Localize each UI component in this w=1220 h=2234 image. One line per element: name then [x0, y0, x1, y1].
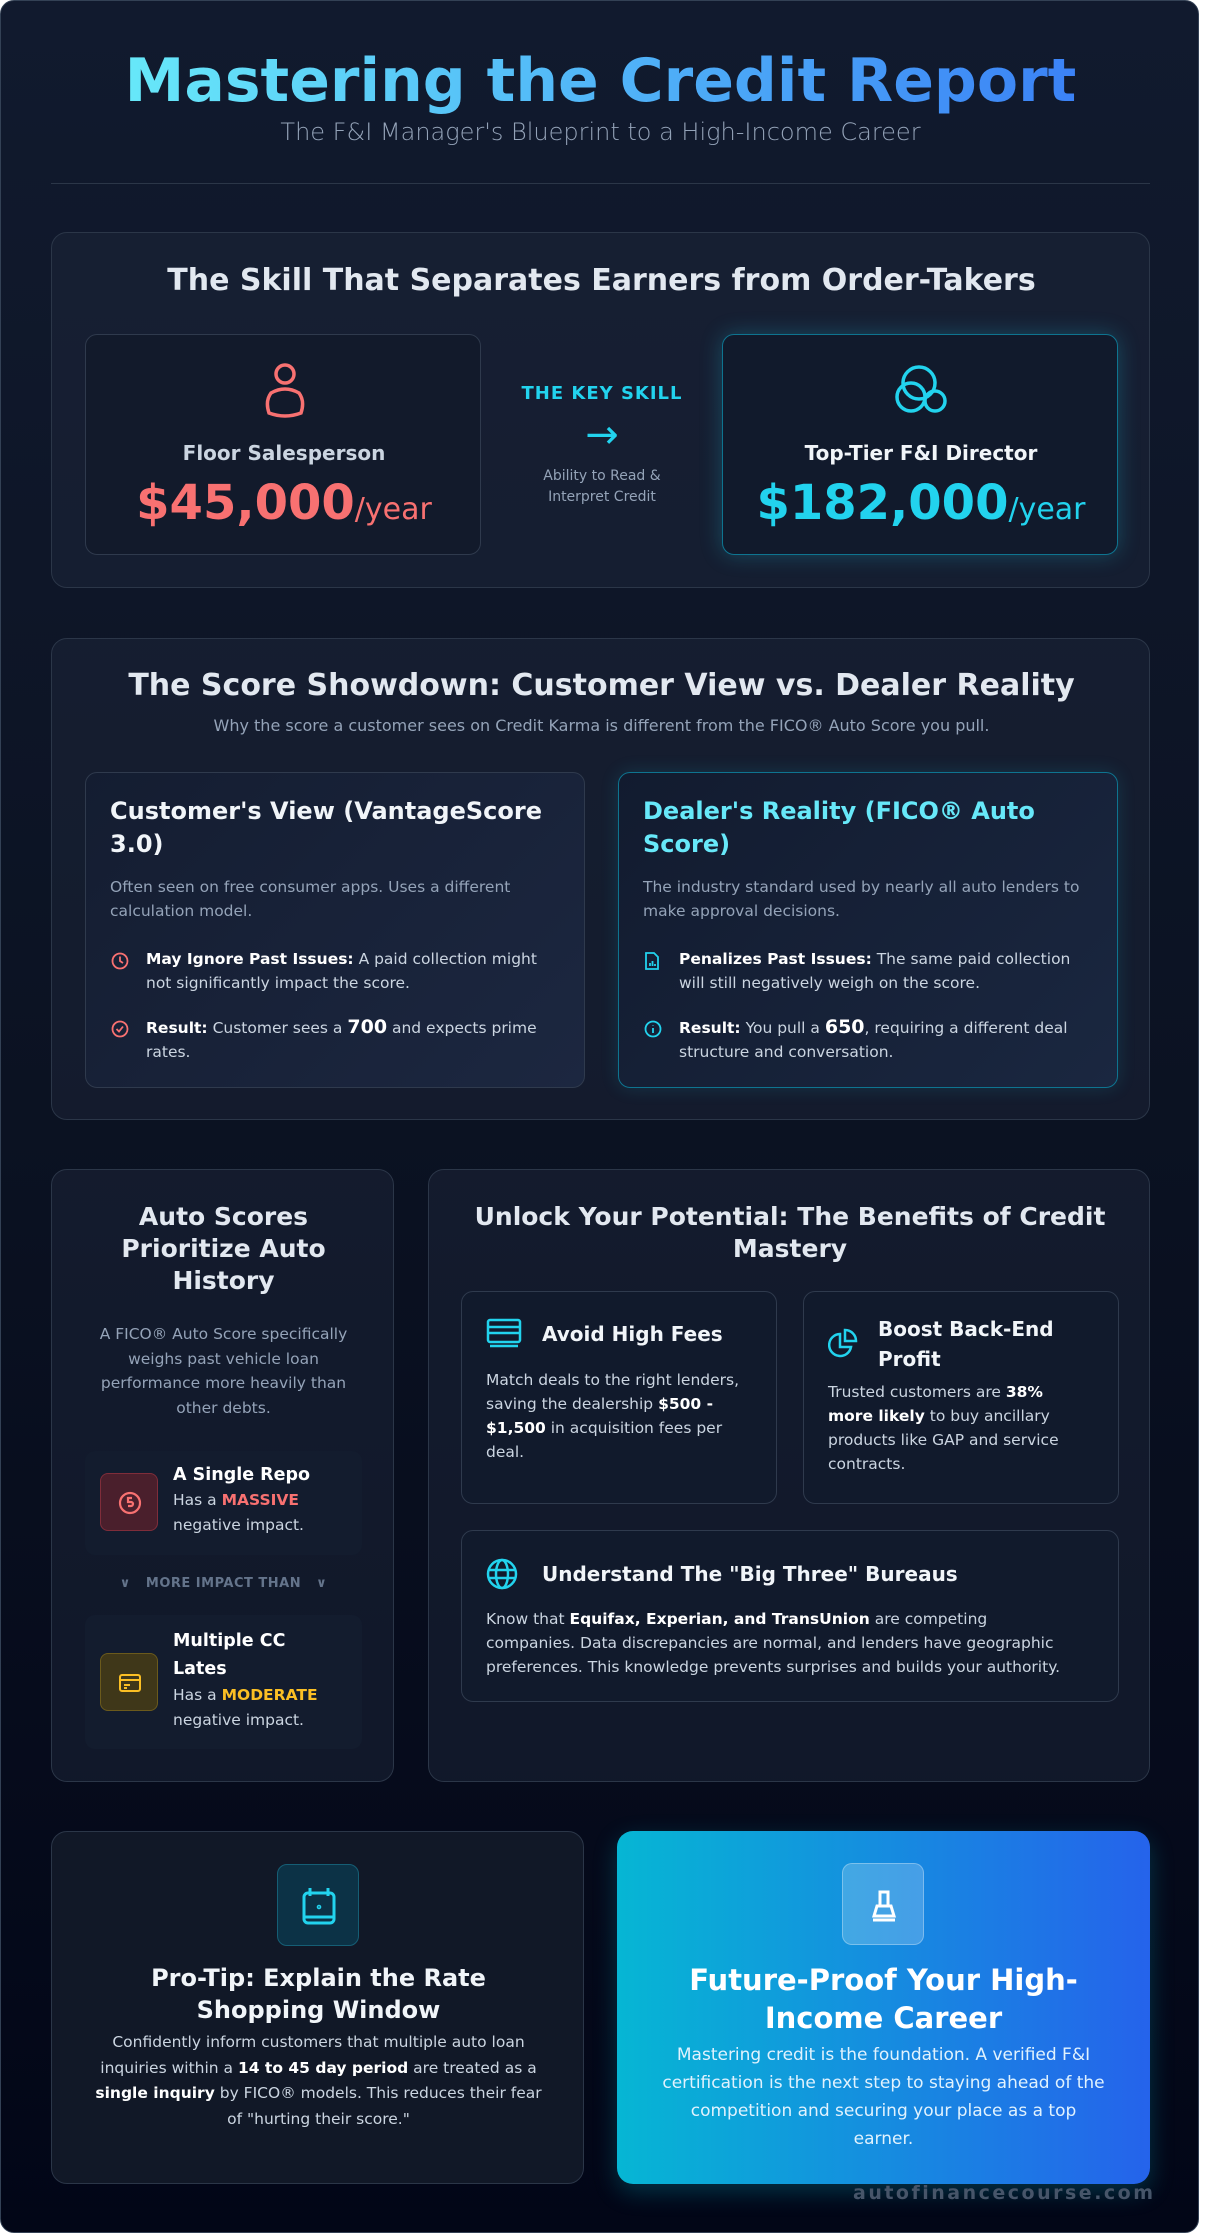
item: cc lates — [85, 1615, 362, 1749]
key skill: Ability to Read & — [543, 468, 661, 484]
description: A FICO® Auto Score specifically weighs past vehicle loan performance more heavily than other debts. — [100, 1325, 347, 1416]
more impact than: ∨ MORE IMPACT THAN ∨ — [120, 1576, 327, 1591]
heading: The Score Showdown: Customer View vs. Dealer Reality — [128, 668, 1075, 703]
text: Mastering credit is the foundation. A verified F&I certification is the next step to staying ahead of the competition and securing your place as a top — [662, 2045, 1105, 2121]
bullet: result: Result: Customer sees a 700 and expects prime rates. — [146, 1016, 537, 1061]
subheading: Why the score a customer sees on Credit Karma is different from the FICO® Auto Score you pull. — [214, 716, 989, 735]
card: bureaus: Know that Equifax, Experian, and TransUnion are competing companies. Data discrepancies are normal, and lenders have geographic preferences. This knowledge prevents surprises and builds your authority. — [486, 1610, 1060, 1676]
text: earner. — [854, 2129, 913, 2149]
icon: calendar — [277, 1864, 359, 1946]
title: Mastering the Credit Report — [125, 46, 1076, 116]
item: repo: A Single Repo — [173, 1465, 310, 1485]
card: dealer reality: Dealer's Reality (FICO® Auto Score) — [643, 797, 1035, 858]
arrow: → — [585, 412, 619, 458]
card: customer view: Often seen on free consumer apps. Uses a different calculation model. — [110, 878, 510, 920]
heading: Future-Proof Your High-Income Career — [689, 1963, 1078, 2035]
card: profit: Trusted customers are 38% more likely to buy ancillary products like GAP and service contracts. — [828, 1383, 1059, 1473]
heading: The Skill That Separates Earners from Order-Takers — [167, 263, 1036, 298]
card: director — [722, 334, 1118, 555]
item: repo: Has a MASSIVE negative impact. — [173, 1491, 304, 1534]
key skill: THE KEY SKILL — [522, 383, 682, 404]
card: dealer reality — [618, 772, 1118, 1088]
panel: score showdown — [51, 638, 1150, 1120]
card: dealer reality: The industry standard used by nearly all auto lenders to make approval decisions. — [643, 878, 1079, 920]
bullet: ignore: May Ignore Past Issues: A paid collection might not significantly impact the score. — [146, 950, 537, 992]
card: customer view — [85, 772, 585, 1088]
key skill: Interpret Credit — [548, 489, 656, 505]
heading: Pro-Tip: Explain the Rate Shopping Window — [151, 1964, 486, 2024]
card: bureaus: Understand The "Big Three" Bureaus — [542, 1562, 958, 1586]
amount: $182,000/year — [756, 475, 1086, 531]
heading: Unlock Your Potential: The Benefits of Credit Mastery — [475, 1202, 1105, 1263]
subtitle: The F&I Manager's Blueprint to a High-Income Career — [280, 118, 921, 146]
card: floor salesperson — [85, 334, 481, 555]
footer: url: autofinancecourse.com — [853, 2182, 1156, 2204]
panel: benefits — [428, 1169, 1150, 1782]
icon: person — [266, 363, 304, 418]
label: Top-Tier F&I Director — [805, 441, 1037, 465]
item: cc lates: Has a MODERATE negative impact. — [173, 1686, 318, 1729]
card: profit — [803, 1291, 1119, 1504]
icon: card — [100, 1653, 158, 1711]
card: fees: Match deals to the right lenders, saving the dealership $500 - $1,500 in acquisition fees per deal. — [486, 1371, 739, 1461]
bullet: penalizes: Penalizes Past Issues: The same paid collection will still negatively weigh on the score. — [679, 950, 1070, 992]
item: repo — [85, 1451, 362, 1555]
icon: circles — [895, 365, 947, 413]
key skill — [522, 383, 682, 505]
panel: cta — [617, 1831, 1150, 2184]
label: Floor Salesperson — [183, 441, 385, 465]
card: fees — [461, 1291, 777, 1504]
bullet: result: Result: You pull a 650, requiring a different deal structure and conversation. — [679, 1016, 1068, 1061]
item: cc lates: Multiple CC Lates — [173, 1631, 285, 1679]
icon: globe — [486, 1558, 518, 1590]
panel: auto scores — [51, 1169, 394, 1782]
card: customer view: Customer's View (VantageScore 3.0) — [110, 797, 542, 858]
icon: card stack — [486, 1318, 522, 1348]
icon: certificate — [842, 1863, 924, 1945]
heading: Auto Scores Prioritize Auto History — [121, 1202, 326, 1295]
card: fees: Avoid High Fees — [542, 1322, 723, 1346]
panel: pro tip — [51, 1831, 584, 2184]
icon: repo — [100, 1473, 158, 1531]
amount: $45,000/year — [136, 475, 432, 531]
card: bureaus — [461, 1530, 1119, 1702]
panel: skill — [51, 232, 1150, 588]
text: Confidently inform customers that multiple auto loan inquiries within a 14 to 45 day period are treated as a single inquiry by FICO® models. This reduces their fear of "hurting their score." — [95, 2033, 542, 2128]
card: profit: Boost Back-End Profit — [878, 1317, 1054, 1371]
icon: pie — [828, 1328, 858, 1358]
